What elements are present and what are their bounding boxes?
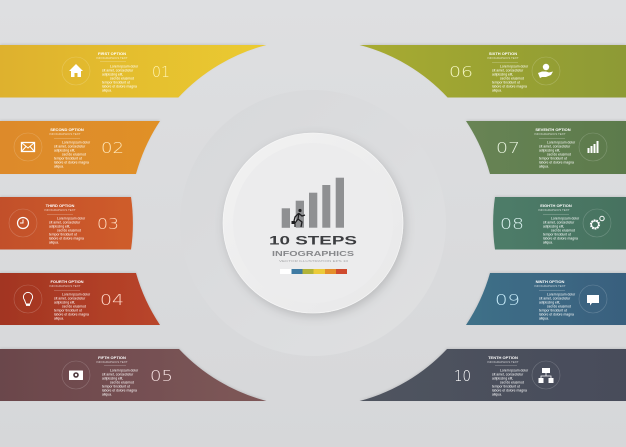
text: fifth option: sed do eiusmod <box>110 380 134 384</box>
text: seventh option: INFOGRAPHICS TEXT <box>534 132 566 136</box>
number 07: 07 <box>496 139 520 157</box>
text: third option <box>44 203 86 244</box>
text: fourth option: sit amet, consectetur <box>54 296 86 300</box>
text: third option: sit amet, consectetur <box>49 220 81 224</box>
text: fourth option: Lorem ipsum dolor <box>62 292 91 296</box>
text: eighth option: sed do eiusmod <box>551 228 575 232</box>
text: fifth option: Lorem ipsum dolor <box>110 368 139 372</box>
panel: option 3 <box>0 197 133 250</box>
text: fifth option: tempor tincidunt ut <box>102 384 130 388</box>
text: ninth option <box>534 279 576 320</box>
panel: option 9 <box>466 273 626 325</box>
panel: option 5 <box>0 349 266 401</box>
text: fourth option: FOURTH OPTION <box>50 279 84 284</box>
text: fourth option: INFOGRAPHICS TEXT <box>49 284 81 288</box>
panel: option 7 <box>466 121 626 174</box>
text: first option: labore et dolore magna <box>102 84 137 88</box>
text: fifth option <box>96 355 139 396</box>
text: fourth option: labore et dolore magna <box>54 312 89 316</box>
text: third option: THIRD OPTION <box>46 203 74 208</box>
text: ninth option: NINTH OPTION <box>536 279 564 284</box>
text: tenth option: tempor tincidunt ut <box>492 384 520 388</box>
panel: option 10 <box>360 349 626 401</box>
text: tenth option <box>487 355 529 396</box>
text: first option: sed do eiusmod <box>110 76 134 80</box>
large background circle <box>129 39 497 407</box>
text: ninth option: sit amet, consectetur <box>539 296 571 300</box>
text: third option: labore et dolore magna <box>49 236 84 240</box>
middle ring <box>180 90 446 356</box>
number 09: 09 <box>495 291 520 309</box>
text: fourth option: adipiscing elit, <box>54 300 75 304</box>
text: fifth option: sit amet, consectetur <box>102 372 134 376</box>
text: sixth option: INFOGRAPHICS TEXT <box>487 56 519 60</box>
text: seventh option: labore et dolore magna <box>539 160 574 164</box>
text: ninth option: aliqua. <box>539 316 549 320</box>
icon: gears <box>583 209 611 237</box>
text: ninth option: INFOGRAPHICS TEXT <box>534 284 566 288</box>
text: ninth option: labore et dolore magna <box>539 312 574 316</box>
text: sixth option: labore et dolore magna <box>492 84 527 88</box>
text: tenth option: INFOGRAPHICS TEXT <box>487 360 519 364</box>
icon: banknote <box>62 361 90 389</box>
text: sixth option: aliqua. <box>492 88 502 92</box>
icon: home <box>62 57 90 85</box>
text: tenth option: aliqua. <box>492 392 502 396</box>
text: eighth option: adipiscing elit, <box>543 224 564 228</box>
text: first option: Lorem ipsum dolor <box>110 64 139 68</box>
text: second option: aliqua. <box>54 164 64 168</box>
text: first option: aliqua. <box>102 88 112 92</box>
text: third option: aliqua. <box>49 240 59 244</box>
text: seventh option: tempor tincidunt ut <box>539 156 567 160</box>
text: second option <box>49 127 91 168</box>
panel: option 2 <box>0 121 160 174</box>
text: first option: FIRST OPTION <box>98 51 126 56</box>
text: sixth option <box>487 51 529 92</box>
text: sixth option: tempor tincidunt ut <box>492 80 520 84</box>
text: eighth option: INFOGRAPHICS TEXT <box>538 208 570 212</box>
text: third option: INFOGRAPHICS TEXT <box>44 208 76 212</box>
text: fifth option: INFOGRAPHICS TEXT <box>96 360 128 364</box>
text: second option: labore et dolore magna <box>54 160 89 164</box>
text: ninth option: adipiscing elit, <box>539 300 560 304</box>
text: second option: sed do eiusmod <box>62 152 86 156</box>
number 06: 06 <box>449 63 473 81</box>
text: second option: tempor tincidunt ut <box>54 156 82 160</box>
text: eighth option <box>538 203 580 244</box>
icon: bar chart <box>579 133 607 161</box>
text: ninth option: Lorem ipsum dolor <box>547 292 576 296</box>
text: ninth option: tempor tincidunt ut <box>539 308 567 312</box>
colour strip <box>280 269 347 274</box>
text: eighth option: Lorem ipsum dolor <box>551 216 580 220</box>
text: fourth option: sed do eiusmod <box>62 304 86 308</box>
text: seventh option: adipiscing elit, <box>539 148 560 152</box>
text: fifth option: adipiscing elit, <box>102 376 123 380</box>
text: sixth option: Lorem ipsum dolor <box>500 64 529 68</box>
text: fifth option: aliqua. <box>102 392 112 396</box>
icon: hand with coin <box>532 57 560 85</box>
icon: running businessman <box>292 209 305 227</box>
text: seventh option: sit amet, consectetur <box>539 144 571 148</box>
text: eighth option: EIGHTH OPTION <box>540 203 572 208</box>
text: fourth option: tempor tincidunt ut <box>54 308 82 312</box>
text: fifth option: FIFTH OPTION <box>98 355 126 360</box>
number 05: 05 <box>150 367 173 385</box>
text: second option: adipiscing elit, <box>54 148 75 152</box>
text: tenth option: sed do eiusmod <box>500 380 524 384</box>
text: tenth option: adipiscing elit, <box>492 376 513 380</box>
text: tenth option: Lorem ipsum dolor <box>500 368 529 372</box>
icon: speech bubble <box>579 285 607 313</box>
number 03: 03 <box>97 215 119 233</box>
text: first option <box>96 51 139 92</box>
text: third option: sed do eiusmod <box>57 228 81 232</box>
text: second option: SECOND OPTION <box>50 127 84 132</box>
text: tenth option: sit amet, consectetur <box>492 372 524 376</box>
icon: light bulb <box>14 285 42 313</box>
text: first option: INFOGRAPHICS TEXT <box>96 56 128 60</box>
text: first option: adipiscing elit, <box>102 72 123 76</box>
text: eighth option: sit amet, consectetur <box>543 220 575 224</box>
text: first option: sit amet, consectetur <box>102 68 134 72</box>
center circle <box>223 133 403 313</box>
text: ninth option: sed do eiusmod <box>547 304 571 308</box>
icon: mail <box>14 133 42 161</box>
panel: option 1 <box>0 45 266 98</box>
number 10: 10 <box>454 367 471 385</box>
text: second option: sit amet, consectetur <box>54 144 86 148</box>
number 01: 01 <box>152 63 170 81</box>
text: tenth option: labore et dolore magna <box>492 388 527 392</box>
icon: clock <box>9 209 37 237</box>
text: first option: tempor tincidunt ut <box>102 80 130 84</box>
panel: option 4 <box>0 273 160 325</box>
bar chart logo <box>282 178 344 228</box>
text: third option: adipiscing elit, <box>49 224 70 228</box>
text: sixth option: sed do eiusmod <box>500 76 524 80</box>
text: tenth option: TENTH OPTION <box>488 355 518 360</box>
text: seventh option <box>534 127 576 168</box>
number 02: 02 <box>101 139 124 157</box>
text: sixth option: adipiscing elit, <box>492 72 513 76</box>
panel: option 8 <box>493 197 626 250</box>
title: 10 steps: 10 STEPS <box>269 234 357 248</box>
caption: VECTOR ILLUSTRATION EPS 10 <box>279 259 349 263</box>
text: sixth option: sit amet, consectetur <box>492 68 524 72</box>
text: eighth option: tempor tincidunt ut <box>543 232 571 236</box>
text: seventh option: Lorem ipsum dolor <box>547 140 576 144</box>
text: seventh option: SEVENTH OPTION <box>535 127 571 132</box>
text: fifth option: labore et dolore magna <box>102 388 137 392</box>
text: third option: tempor tincidunt ut <box>49 232 77 236</box>
text: eighth option: labore et dolore magna <box>543 236 578 240</box>
panel: option 6 <box>360 45 626 98</box>
number 04: 04 <box>100 291 124 309</box>
text: seventh option: aliqua. <box>539 164 549 168</box>
text: fourth option: aliqua. <box>54 316 64 320</box>
text: eighth option: aliqua. <box>543 240 553 244</box>
subtitle: infographics: INFOGRAPHICS <box>272 249 354 258</box>
text: third option: Lorem ipsum dolor <box>57 216 86 220</box>
text: sixth option: SIXTH OPTION <box>489 51 517 56</box>
number 08: 08 <box>500 215 524 233</box>
icon: people at a board <box>532 361 560 389</box>
text: seventh option: sed do eiusmod <box>547 152 571 156</box>
text: second option: Lorem ipsum dolor <box>62 140 91 144</box>
text: second option: INFOGRAPHICS TEXT <box>49 132 81 136</box>
text: fourth option <box>49 279 91 320</box>
